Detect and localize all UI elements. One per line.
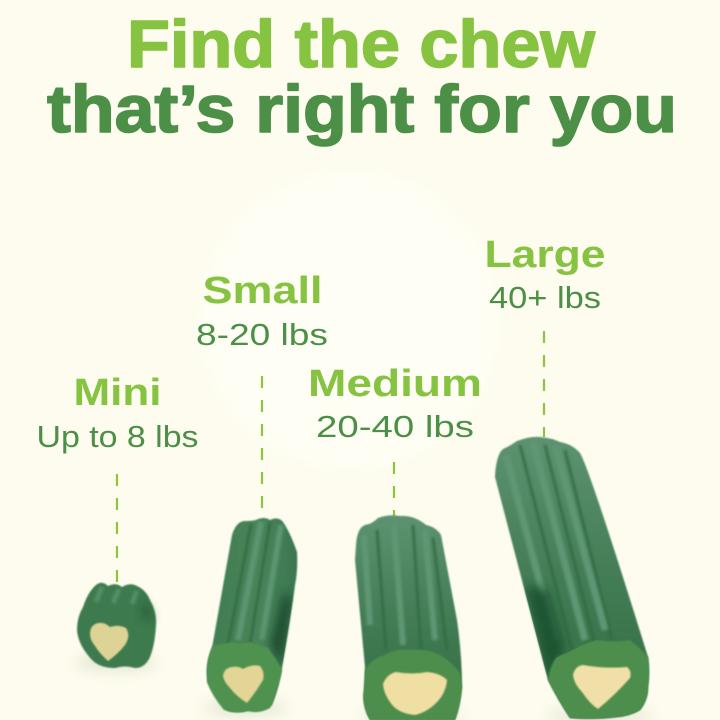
chew: large [495, 437, 649, 719]
title: Find the chew [127, 7, 596, 82]
chew: small [207, 518, 297, 712]
title: that’s right for you [47, 72, 677, 147]
chew: medium [355, 515, 462, 720]
label: medium: 20-40 lbs [316, 409, 474, 444]
label: medium: Medium [308, 363, 482, 405]
label: mini [36, 372, 198, 454]
label: small [196, 270, 328, 352]
label: medium [308, 363, 482, 444]
label: mini: Up to 8 lbs [36, 419, 198, 454]
dashed leader lines [117, 331, 544, 583]
label: small: Small [202, 270, 322, 312]
title [47, 7, 677, 147]
label: mini: Mini [74, 372, 162, 414]
label: large: 40+ lbs [489, 280, 601, 315]
label: small: 8-20 lbs [196, 317, 328, 352]
shadows [76, 653, 654, 720]
label: large [484, 234, 606, 315]
chew: mini [77, 583, 156, 668]
label: large: Large [484, 234, 606, 276]
